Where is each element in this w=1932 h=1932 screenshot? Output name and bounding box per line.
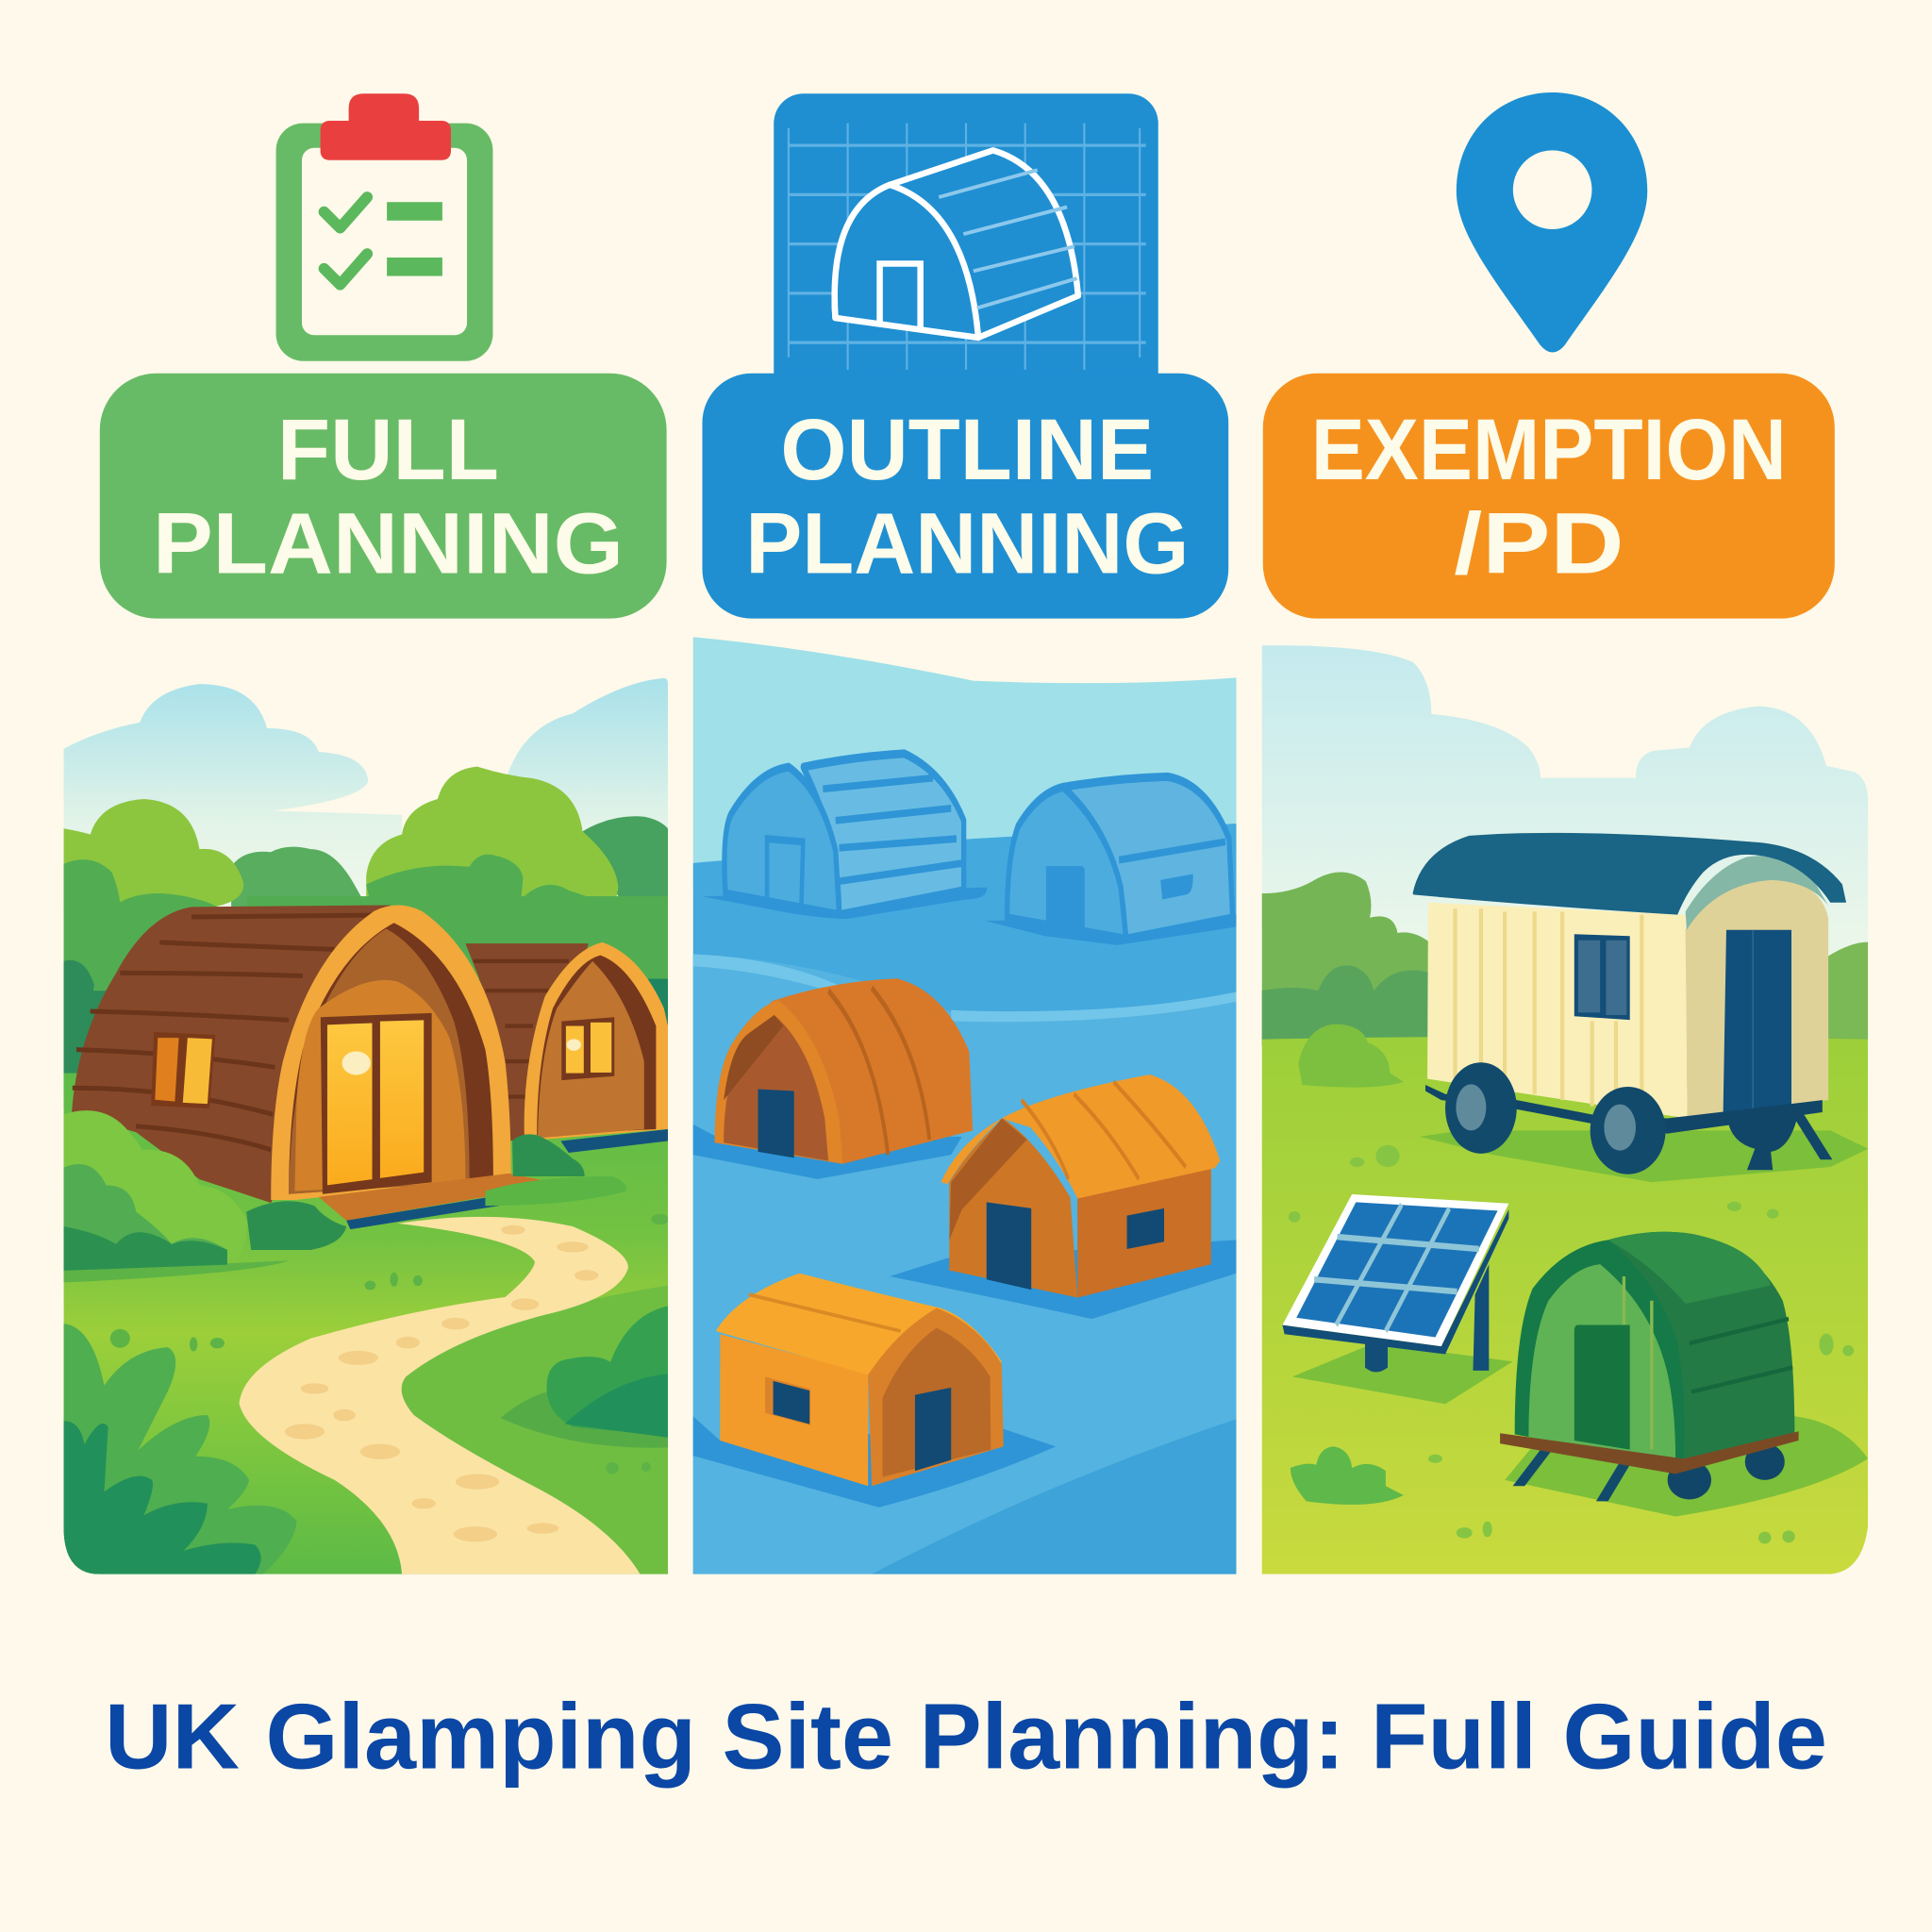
foreground shrub (1291, 1446, 1404, 1505)
water (693, 824, 1237, 1574)
label: full planning (100, 374, 667, 619)
green hut (1500, 1232, 1868, 1517)
winding path (240, 1217, 641, 1574)
small bush by second pod (512, 1134, 585, 1176)
grass field (64, 1074, 668, 1574)
blueprint pod right (986, 776, 1237, 945)
solar panel (1282, 1194, 1513, 1404)
orange pod 1 (693, 978, 973, 1179)
sky with clouds (64, 678, 668, 908)
right shrub (500, 1306, 668, 1448)
left bush (64, 1110, 346, 1282)
bush (1298, 1024, 1404, 1088)
trees (1262, 873, 1868, 1045)
icon: blueprint pod (774, 93, 1158, 414)
blueprint pod left (702, 754, 987, 919)
label: exemption / PD: /PD (1454, 495, 1624, 591)
label: outline planning: PLANNING (745, 495, 1189, 591)
title: UK Glamping Site Planning: Full Guide (105, 1684, 1827, 1788)
label: full planning: FULL (277, 402, 499, 498)
label: outline planning (702, 374, 1228, 619)
grass shadow (485, 1176, 626, 1206)
grass tufts (1289, 1145, 1854, 1544)
second wood pod (465, 942, 668, 1153)
orange pod 2 (890, 1074, 1237, 1319)
sky with clouds (1262, 645, 1868, 957)
label: outline planning: OUTLINE (780, 402, 1154, 498)
main wood pod (72, 905, 561, 1229)
panel: full planning scene (64, 678, 669, 1574)
label: exemption / PD (1263, 374, 1835, 619)
panel: exemption scene (1262, 645, 1868, 1574)
meadow (1262, 1037, 1868, 1574)
icon: location pin (1457, 92, 1647, 353)
orange pod 3 (693, 1274, 1056, 1507)
label: exemption / PD: EXEMPTION (1311, 402, 1787, 498)
shepherd hut (1413, 833, 1868, 1182)
panel: outline planning scene (693, 632, 1237, 1574)
label: full planning: PLANNING (153, 495, 624, 591)
grass tufts (110, 1214, 669, 1474)
foreground plants (64, 1324, 297, 1574)
background trees (64, 767, 668, 1108)
icon: clipboard checklist (276, 93, 492, 361)
